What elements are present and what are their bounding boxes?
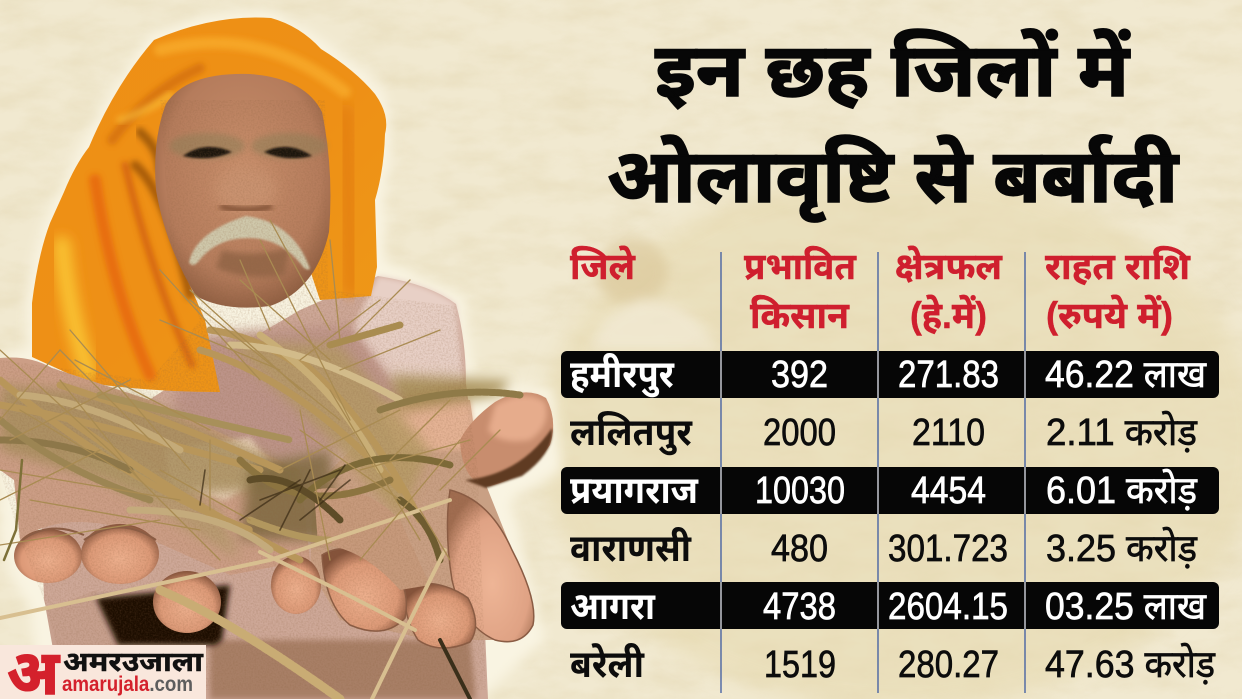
row 1: 271.83 — [898, 354, 999, 396]
row 3: 4454 — [911, 470, 986, 512]
header: प्रभावित किसान: प्रभावित — [744, 246, 857, 287]
left hand knuckle creases — [22, 528, 156, 540]
row 3 — [570, 468, 1198, 512]
row 2 — [570, 410, 1198, 456]
row band: प्रयागराज — [561, 467, 1219, 514]
eye sockets — [169, 133, 245, 159]
header: जिले: जिले — [570, 245, 636, 287]
nose — [216, 168, 276, 212]
row 1 — [570, 352, 1207, 398]
row band: आगरा — [561, 582, 1219, 629]
row 6: बरेली — [570, 642, 645, 686]
title — [607, 28, 1180, 223]
knuckle above right middle finger — [314, 488, 430, 590]
row 4: वाराणसी — [570, 526, 692, 570]
white halo around figure — [0, 11, 562, 699]
row band: हमीरपुर — [561, 351, 1219, 398]
row 4: 3.25 करोड़ — [1046, 526, 1198, 570]
stem at left edge — [4, 460, 22, 560]
row 1: 392 — [771, 354, 828, 396]
row 2: 2.11 करोड़ — [1046, 410, 1198, 454]
logo domain: amarujala.com — [62, 673, 193, 696]
row 5: 4738 — [763, 586, 836, 628]
title line 1: इन छह जिलों में — [655, 28, 1131, 112]
row 6 — [570, 642, 1216, 686]
wheat ears — [0, 220, 520, 699]
ring finger right — [405, 583, 476, 648]
logo hindi wordmark: अमरउजाला — [63, 647, 204, 677]
lower body — [46, 590, 130, 699]
logo: Amar Ujala — [0, 639, 206, 699]
row 5 — [570, 586, 1207, 628]
long finger far right — [447, 490, 534, 642]
eyes — [183, 147, 232, 158]
row 6: 47.63 करोड़ — [1045, 642, 1216, 686]
header: प्रभावित किसान: किसान — [750, 295, 850, 336]
row 4: 301.723 — [888, 528, 1008, 570]
row 4: 480 — [771, 528, 828, 570]
header: राहत राशि (रुपये में): राहत राशि — [1045, 246, 1191, 287]
table — [561, 245, 1219, 693]
row 2: ललितपुर — [570, 410, 693, 456]
awns — [0, 220, 500, 560]
skin grain texture — [0, 100, 486, 690]
face — [155, 74, 330, 308]
dark gap between hands — [96, 585, 230, 645]
header: राहत राशि (रुपये में) — [1045, 246, 1191, 336]
faint ghost farmer behind table — [590, 238, 718, 350]
peach right palm highlight — [375, 400, 475, 450]
thumb — [460, 392, 553, 486]
row 1: हमीरपुर — [570, 352, 675, 398]
row 6: 1519 — [764, 644, 836, 686]
header: क्षेत्रफल (हे.में): क्षेत्रफल — [895, 245, 1003, 287]
row 5: 2604.15 — [888, 586, 1008, 628]
row 6: 280.27 — [898, 644, 999, 686]
fingers — [14, 392, 553, 648]
middle finger right — [322, 549, 406, 631]
row 5: 03.25 लाख — [1045, 586, 1207, 628]
shirt highlight right shoulder — [352, 276, 464, 395]
row 2: 2000 — [763, 412, 836, 454]
turban shading folds — [62, 43, 352, 375]
row 2: 2110 — [912, 412, 985, 454]
header: राहत राशि (रुपये में): (रुपये में) — [1046, 294, 1173, 336]
mustache — [189, 216, 310, 270]
row 4 — [570, 526, 1198, 570]
row 3: 10030 — [755, 470, 845, 512]
title line 2: ओलावृष्टि से बर्बादी — [607, 134, 1180, 223]
row 3: प्रयागराज — [570, 470, 699, 512]
header: प्रभावित किसान — [744, 246, 857, 336]
long straw stems — [0, 500, 450, 699]
shirt shaded centre — [170, 325, 420, 470]
farmer photo illustration — [0, 11, 562, 699]
right palm — [310, 400, 532, 640]
row 5: आगरा — [570, 586, 656, 628]
header: क्षेत्रफल (हे.में): (हे.में) — [910, 294, 987, 336]
body / shirt — [40, 276, 488, 699]
left palm — [0, 357, 310, 575]
header: क्षेत्रफल (हे.में) — [895, 245, 1003, 336]
wheat colour mass — [0, 340, 510, 560]
turban — [32, 17, 386, 392]
lit palm centre — [165, 438, 275, 500]
row 1: 46.22 लाख — [1045, 354, 1207, 396]
row 3: 6.01 करोड़ — [1046, 468, 1198, 512]
mouth and chin shadow — [216, 248, 290, 277]
